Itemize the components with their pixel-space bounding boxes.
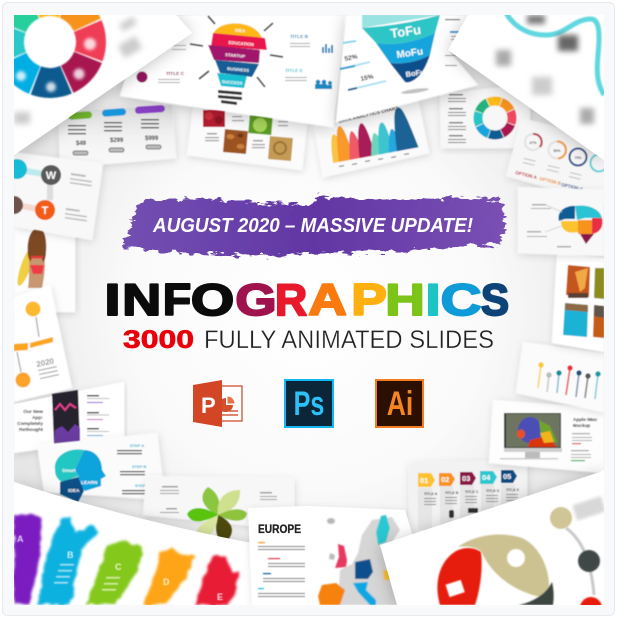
bulb labels: BUSINESS bbox=[227, 66, 249, 73]
panel: brush strokes bbox=[14, 482, 262, 605]
bulb rays bbox=[190, 16, 283, 87]
circle: T: T bbox=[42, 205, 49, 217]
bulb titles: TITLE B bbox=[290, 34, 309, 40]
pie chart bbox=[437, 535, 554, 605]
pricing prices bbox=[76, 136, 159, 147]
ring values: 75% bbox=[574, 156, 582, 160]
title: INFOGRAPHICS: P bbox=[351, 276, 387, 325]
step captions bbox=[65, 173, 92, 221]
step tags: 01 bbox=[420, 476, 428, 485]
subtitle number: 3000 bbox=[123, 326, 194, 354]
photo: canyon bbox=[566, 265, 590, 298]
phone app headline: App: bbox=[32, 415, 43, 421]
flower captions bbox=[160, 486, 277, 513]
monitor headline bbox=[573, 417, 598, 428]
step tags: 03 bbox=[462, 474, 470, 483]
panel: numbered steps bbox=[409, 460, 527, 540]
brain leader lines bbox=[545, 205, 562, 232]
icon: Illustrator bbox=[376, 380, 423, 427]
icon: Illustrator: Ai bbox=[387, 385, 413, 423]
timeline arc bbox=[566, 528, 594, 595]
icon: bar glyph bbox=[322, 44, 333, 53]
step icons bbox=[449, 508, 478, 518]
step titles: TITLE D bbox=[486, 489, 500, 493]
phone app headline bbox=[17, 409, 43, 433]
monitor bbox=[504, 413, 562, 459]
photo: mountain bbox=[593, 305, 604, 338]
icon: PowerPoint bbox=[193, 380, 242, 427]
head shape: LEARN bbox=[81, 480, 98, 486]
title: INFOGRAPHICS bbox=[105, 274, 509, 325]
step titles: TITLE B bbox=[445, 491, 459, 495]
panel: monitor mockup bbox=[489, 400, 604, 473]
funnel labels: MoFu bbox=[396, 46, 424, 61]
option captions bbox=[523, 158, 582, 180]
donut chart bbox=[0, 0, 104, 96]
bulb titles: TITLE C bbox=[166, 71, 185, 77]
option labels: OPTION B bbox=[539, 176, 562, 186]
ring: option C bbox=[570, 148, 586, 166]
title: INFOGRAPHICS: I bbox=[105, 275, 120, 325]
panel: phone app bbox=[14, 382, 124, 453]
wave line bbox=[506, 13, 604, 95]
title: INFOGRAPHICS: I bbox=[426, 276, 440, 325]
icon: Photoshop bbox=[285, 380, 333, 427]
ring values bbox=[529, 141, 582, 160]
title: INFOGRAPHICS: A bbox=[308, 276, 347, 325]
panel: surfer photo bbox=[14, 218, 75, 312]
panel: head diagram bbox=[37, 433, 165, 502]
pricing lists bbox=[68, 119, 159, 134]
funnel labels bbox=[389, 22, 426, 79]
bulb bands bbox=[208, 23, 267, 88]
photo: apple bbox=[248, 115, 273, 135]
funnel right text bbox=[445, 19, 469, 66]
funnel bbox=[362, 15, 440, 82]
slider knobs bbox=[538, 362, 601, 379]
percent labels bbox=[344, 53, 374, 83]
monitor headline: Apple iMac bbox=[573, 417, 598, 422]
step columns bbox=[418, 484, 515, 530]
brush: orange D bbox=[143, 548, 195, 605]
brush: cyan B: B bbox=[67, 550, 74, 560]
panel: pricing table bbox=[58, 105, 176, 168]
head step text bbox=[117, 450, 147, 494]
percent labels: 52% bbox=[344, 53, 358, 63]
step tags: 05 bbox=[503, 472, 511, 481]
banner text: AUGUST 2020 – MASSIVE UPDATE! bbox=[152, 215, 473, 237]
background bbox=[14, 52, 604, 542]
timeline lines bbox=[17, 317, 39, 372]
circle: W: W bbox=[46, 170, 57, 182]
title: INFOGRAPHICS: F bbox=[163, 275, 191, 325]
donut icons bbox=[16, 38, 96, 92]
panel: top-left donut bbox=[0, 0, 192, 155]
Europe map bbox=[318, 515, 400, 605]
option labels: OPTION C bbox=[561, 182, 584, 192]
bulb caption lines bbox=[158, 43, 310, 83]
feature list bbox=[87, 395, 109, 436]
bulb titles bbox=[166, 34, 309, 77]
head steps bbox=[130, 443, 149, 488]
bulb labels: IDEA bbox=[235, 28, 245, 33]
pie icons bbox=[446, 549, 525, 597]
timeline bars bbox=[14, 337, 53, 351]
photo: lake bbox=[563, 303, 588, 337]
Europe text rows bbox=[258, 542, 305, 597]
panel: top-right wave bbox=[448, 13, 604, 160]
percent bars bbox=[340, 40, 386, 91]
photo: nuts bbox=[223, 129, 248, 154]
brain puzzle bbox=[559, 206, 603, 244]
monitor accents bbox=[571, 443, 585, 461]
phone app headline: Rethought bbox=[19, 427, 43, 433]
chart x labels bbox=[339, 153, 409, 167]
phone bbox=[52, 390, 80, 445]
brush: red E bbox=[195, 556, 240, 605]
panel: W and T steps bbox=[5, 152, 103, 240]
panel: Europe map bbox=[248, 506, 420, 605]
head shape: IDEA bbox=[68, 488, 80, 494]
circle: brown bbox=[14, 196, 24, 214]
bulb labels: EDUCATION bbox=[228, 40, 254, 47]
panel: lightbulb bbox=[120, 15, 346, 127]
panel: photo grid bbox=[552, 253, 604, 352]
phone app headline: Completely bbox=[17, 421, 43, 427]
brush: orange D: D bbox=[163, 577, 170, 587]
pricing prices: $299 bbox=[110, 138, 124, 144]
photo: berries bbox=[203, 110, 225, 127]
mountain chart bbox=[325, 105, 419, 163]
monitor text bbox=[571, 433, 592, 458]
brush: purple A bbox=[14, 513, 42, 605]
blurred icons bbox=[496, 15, 594, 124]
pricing buttons bbox=[73, 145, 161, 155]
banner: brush stroke bbox=[122, 196, 506, 256]
funnel labels: ToFu bbox=[389, 22, 422, 41]
photo: meadow bbox=[594, 268, 604, 299]
head steps: STEP B bbox=[132, 464, 146, 469]
bulb labels: SUCCESS bbox=[222, 79, 243, 86]
panel: puzzle brain bbox=[518, 187, 604, 256]
chart title: DATA ANALYTICS CHART bbox=[338, 105, 399, 125]
percent labels: 15% bbox=[360, 73, 374, 83]
connector lines bbox=[16, 170, 50, 210]
bulb labels bbox=[222, 28, 254, 86]
title: INFOGRAPHICS: N bbox=[122, 275, 161, 325]
timeline step 1 bbox=[550, 507, 572, 529]
wheel labels bbox=[448, 94, 466, 143]
option labels bbox=[515, 170, 584, 190]
step tags bbox=[418, 470, 517, 487]
pricing pills bbox=[68, 105, 165, 120]
ring values: 47% bbox=[529, 141, 537, 145]
brush: red E: E bbox=[217, 592, 223, 602]
bulb labels: STARTUP bbox=[225, 52, 245, 59]
step titles: TITLE C bbox=[465, 490, 479, 494]
title: INFOGRAPHICS: H bbox=[385, 275, 425, 325]
timeline year: 2020 bbox=[36, 356, 55, 369]
monitor footer bbox=[500, 458, 558, 460]
ring: option B bbox=[548, 141, 566, 158]
ring: option D bbox=[590, 154, 608, 172]
step body lines bbox=[424, 494, 518, 505]
step titles bbox=[424, 488, 520, 496]
food captions bbox=[205, 116, 288, 148]
phone app headline: Our New bbox=[23, 409, 43, 415]
monitor headline: Mockup bbox=[573, 423, 591, 428]
brush: cyan B bbox=[37, 518, 98, 605]
step titles: TITLE A bbox=[424, 492, 438, 496]
panel: data analytics chart bbox=[314, 100, 429, 177]
slider lines bbox=[538, 365, 598, 399]
brush: green C text lines bbox=[102, 577, 120, 590]
blurred block bbox=[572, 496, 606, 521]
title: INFOGRAPHICS: R bbox=[275, 276, 307, 325]
title: INFOGRAPHICS: G bbox=[235, 276, 277, 325]
ring values: 50% bbox=[553, 149, 561, 153]
brush: green C: C bbox=[115, 562, 122, 572]
brush: cyan B text lines bbox=[54, 564, 74, 584]
panel: funnel bbox=[336, 15, 478, 122]
circle: S bbox=[14, 158, 28, 180]
panel: bottom-right pie bbox=[380, 470, 606, 618]
head shape bbox=[55, 449, 106, 502]
circle: top marker bbox=[26, 302, 40, 316]
subtitle bbox=[123, 326, 494, 354]
funnel labels: BoFu bbox=[405, 67, 426, 79]
pricing prices: $49 bbox=[76, 141, 87, 147]
ring: option A bbox=[525, 134, 542, 150]
photo: surfer bbox=[14, 228, 46, 288]
head shape: Smart bbox=[62, 468, 76, 474]
bulb base bbox=[218, 90, 242, 105]
wheel chart bbox=[473, 96, 517, 140]
circle: bottom marker bbox=[16, 372, 30, 388]
flower petals bbox=[187, 487, 247, 542]
Europe heading: EUROPE bbox=[258, 524, 301, 536]
panel: flower diagram bbox=[143, 476, 294, 542]
icon: PowerPoint: P bbox=[201, 393, 216, 418]
blurred gray labels bbox=[14, 17, 142, 124]
head steps: STEP C bbox=[135, 483, 149, 488]
timeline caption lines bbox=[38, 366, 59, 379]
step tags: 04 bbox=[482, 473, 491, 482]
step titles: TITLE E bbox=[506, 488, 520, 492]
head steps: STEP A bbox=[130, 443, 144, 448]
brain captions bbox=[527, 204, 571, 248]
subtitle text: FULLY ANIMATED SLIDES bbox=[204, 326, 494, 354]
panel: food photos bbox=[187, 108, 307, 170]
title: INFOGRAPHICS: O bbox=[191, 274, 234, 325]
panel: timeline bbox=[14, 285, 72, 402]
option labels: OPTION A bbox=[515, 170, 538, 180]
brush: green C bbox=[87, 540, 143, 605]
timeline step 2 bbox=[578, 550, 600, 572]
timeline step 3 bbox=[580, 597, 602, 618]
icon: Photoshop: Ps bbox=[294, 385, 324, 423]
panel: circular wheel list bbox=[440, 84, 530, 148]
title: INFOGRAPHICS: S bbox=[481, 276, 509, 325]
photo: grain bbox=[268, 136, 293, 161]
icon: people bbox=[315, 80, 332, 89]
brush: purple A: A bbox=[17, 534, 24, 544]
icon: pie dot bbox=[136, 72, 148, 82]
panel: option rings bbox=[506, 120, 604, 190]
funnel shadow bbox=[401, 87, 429, 95]
title: INFOGRAPHICS: C bbox=[441, 275, 481, 325]
bulb titles: TITLE E bbox=[285, 68, 304, 74]
panel: slider chart bbox=[516, 342, 604, 412]
pricing prices: $999 bbox=[145, 136, 159, 142]
step tags: 02 bbox=[441, 475, 449, 484]
